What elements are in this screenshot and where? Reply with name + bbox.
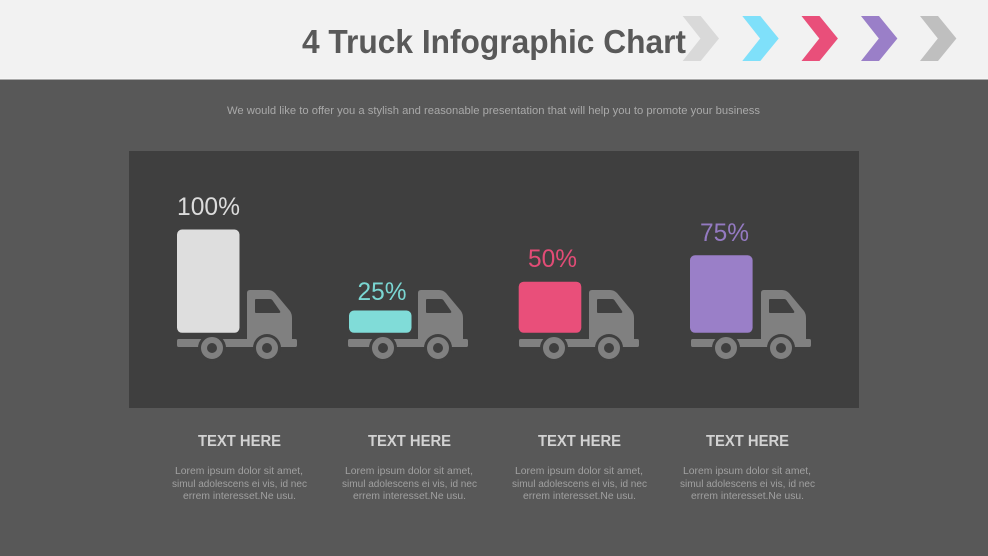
- text block 3: errem interesset.Ne usu.: [523, 491, 636, 502]
- value 25%: 25%: [358, 278, 406, 306]
- text block 4: TEXT HERE: [706, 433, 789, 450]
- text block 4: simul adolescens ei vis, id nec: [680, 479, 815, 490]
- text block 1: [172, 433, 307, 502]
- icon: truck 3: [519, 290, 639, 362]
- text block 3: Lorem ipsum dolor sit amet,: [515, 466, 643, 477]
- icon: truck 2: [348, 290, 468, 362]
- chevron arrows: [683, 16, 956, 61]
- icon: truck 4: [691, 290, 811, 362]
- truck 2: 25%: [348, 278, 468, 362]
- text block 4: [680, 433, 815, 502]
- header band: [0, 0, 988, 80]
- text block 2: errem interesset.Ne usu.: [353, 491, 466, 502]
- text block 2: simul adolescens ei vis, id nec: [342, 479, 477, 490]
- text block 2: TEXT HERE: [368, 433, 451, 450]
- text block 2: [342, 433, 477, 502]
- truck 1: 100%: [177, 193, 297, 362]
- value 50%: 50%: [528, 245, 577, 273]
- cargo box 25%: [349, 310, 412, 333]
- cargo box 75%: [690, 255, 753, 333]
- text block 3: TEXT HERE: [538, 433, 621, 450]
- cargo box 50%: [519, 282, 581, 333]
- text block 2: Lorem ipsum dolor sit amet,: [345, 466, 473, 477]
- value 100%: 100%: [177, 193, 240, 221]
- text block 1: Lorem ipsum dolor sit amet,: [175, 466, 303, 477]
- text block 4: Lorem ipsum dolor sit amet,: [683, 466, 811, 477]
- panel: truck chart: [129, 151, 859, 408]
- value 75%: 75%: [700, 219, 749, 247]
- text block 1: TEXT HERE: [198, 433, 281, 450]
- text block 3: [512, 433, 647, 502]
- truck 4: 75%: [690, 219, 811, 362]
- text block 1: errem interesset.Ne usu.: [183, 491, 296, 502]
- title: 4 Truck Infographic Chart: [302, 23, 686, 60]
- truck 3: 50%: [519, 245, 639, 362]
- subtitle: We would like to offer you a stylish and reasonable presentation that will help you to promote your business: [227, 105, 761, 117]
- icon: truck 1: [177, 290, 297, 362]
- text block 4: errem interesset.Ne usu.: [691, 491, 804, 502]
- text block 1: simul adolescens ei vis, id nec: [172, 479, 307, 490]
- text block 3: simul adolescens ei vis, id nec: [512, 479, 647, 490]
- cargo box 100%: [177, 230, 240, 333]
